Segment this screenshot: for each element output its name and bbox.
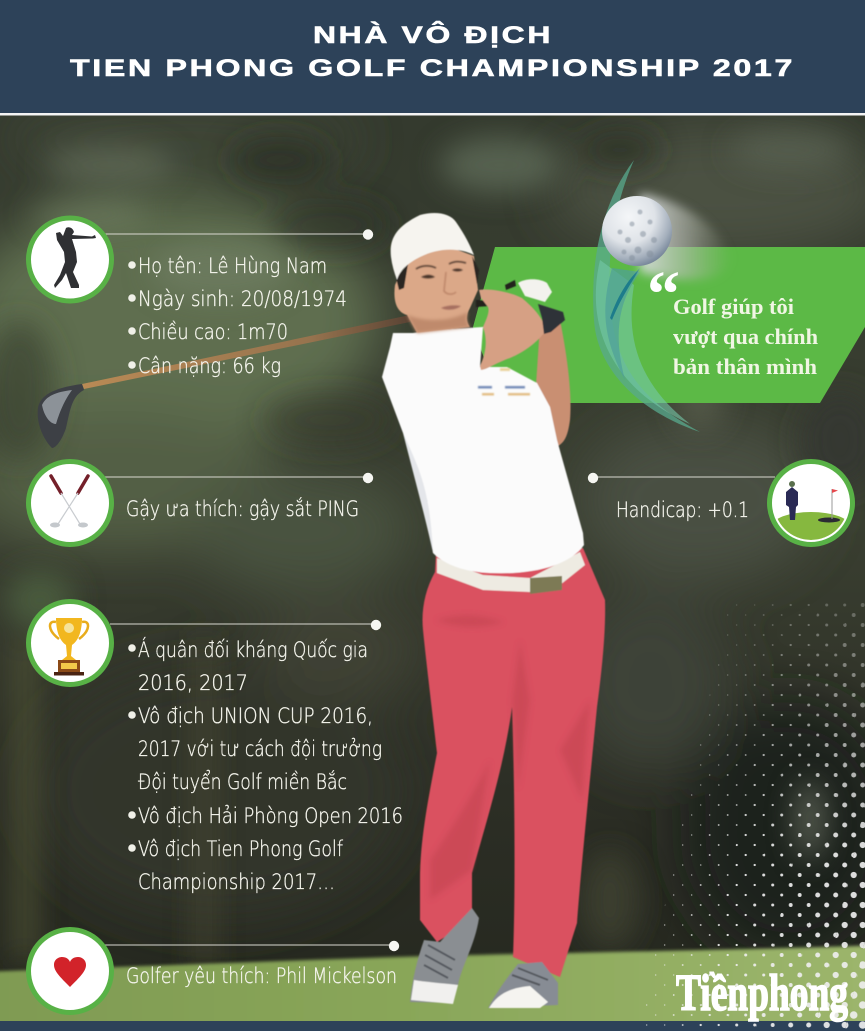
favourite golfer text: Golfer yêu thích: Phil Mickelson [126,964,397,988]
quotation mark: “ [647,258,680,331]
quote text [673,294,818,379]
connector dot [363,229,373,240]
connector dot [371,620,381,630]
connector line [105,944,394,946]
belt buckle [530,576,562,594]
halftone dots [638,600,865,1031]
profile block [28,218,373,378]
profile list: Họ tên: Lê Hùng Nam [138,254,327,278]
achievements list: Á quân đối kháng Quốc gia [138,637,368,662]
connector line [593,476,775,478]
green quote banner [473,247,865,403]
icon: golfer on green with flag [770,462,852,544]
face shading [407,312,470,333]
handicap block [588,462,852,544]
achievements list: Championship 2017… [138,870,335,894]
header bar [0,0,865,116]
shirt shading [403,433,433,553]
title [70,21,795,82]
golf ball with motion blur [602,194,732,280]
icon: crossed clubs [28,462,112,544]
front arm [479,289,546,370]
black glove [538,304,565,334]
handicap text: Handicap: +0.1 [616,498,749,522]
achievements list: Vô địch Tien Phong Golf [138,837,343,861]
left shoe [410,908,479,1003]
favourite golfer block [28,930,399,1012]
neck and face [394,246,478,333]
connector dot [588,473,598,483]
icon: golfer silhouette [28,218,112,301]
achievements list: Vô địch UNION CUP 2016, [138,704,373,728]
achievements block [28,602,403,894]
achievements list: 2017 với tư cách đội trưởng [138,737,382,761]
profile list: Chiều cao: 1m70 [138,320,288,344]
golfer photo [382,213,605,1008]
favourite club text: Gậy ưa thích: gậy sắt PING [126,497,359,521]
profile list [128,254,347,378]
achievements list: Đội tuyển Golf miền Bắc [138,769,347,794]
trousers [420,548,605,977]
right shoe [488,962,558,1008]
trouser folds [430,615,590,900]
shirt [382,327,584,573]
connector dot [389,941,399,951]
title: NHÀ VÔ ĐỊCH [313,21,553,49]
cap [391,213,474,280]
club grip [476,300,490,307]
left shoe laces [424,945,455,978]
white glove [518,279,552,302]
icon: heart [28,930,112,1012]
connector line [105,476,368,478]
title: TIEN PHONG GOLF CHAMPIONSHIP 2017 [70,55,795,82]
belt [437,552,585,592]
quote text: Golf giúp tôi [673,294,794,319]
favourite club block [28,462,373,544]
connector line [105,233,368,235]
profile list: Ngày sinh: 20/08/1974 [138,287,347,311]
shirt logos [478,368,530,396]
quote text: vượt qua chính [673,324,818,349]
connector dot [363,473,373,483]
grass [0,945,865,1031]
eyes and mouth [416,262,466,310]
footer bar [0,1021,865,1031]
achievements list [128,637,403,894]
icon: trophy [28,602,112,684]
quote [647,258,818,379]
achievements list: Vô địch Hải Phòng Open 2016 [138,804,403,828]
achievements list: 2016, 2017 [138,671,248,695]
quote text: bản thân mình [673,354,817,379]
swoosh behind golf ball [593,160,700,432]
hair [396,256,479,290]
golf club shaft and head [38,315,410,448]
right shoe laces [512,968,548,985]
profile list: Cân nặng: 66 kg [138,354,281,378]
connector line [110,623,376,625]
back arm [536,320,571,446]
